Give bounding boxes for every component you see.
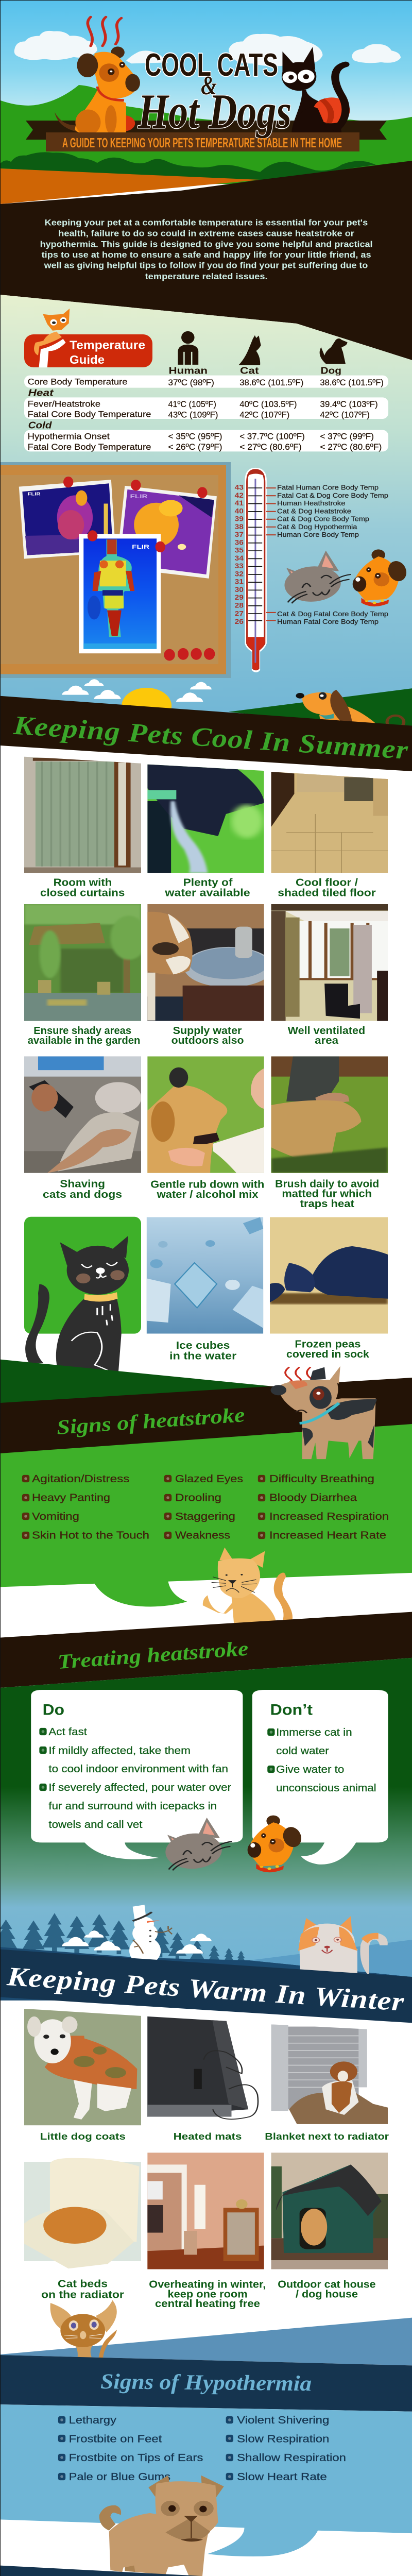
thermometer numbers: 40 bbox=[235, 507, 244, 515]
ribbon bbox=[26, 46, 387, 151]
icon: small clouds bbox=[62, 679, 212, 702]
thermometer numbers: 34 bbox=[235, 554, 244, 562]
captions row 4 bbox=[169, 1339, 370, 1362]
captions row 4: Frozen peas bbox=[295, 1339, 360, 1350]
list: heatstroke signs: Skin Hot to the Touch bbox=[32, 1530, 149, 1541]
thermometer numbers: 35 bbox=[235, 547, 244, 554]
column heads: Human bbox=[169, 366, 208, 376]
thermometer numbers: 30 bbox=[235, 586, 244, 594]
row labels: Fever/Heatstroke bbox=[28, 399, 100, 409]
values: 39.4ºC (103ºF) bbox=[320, 399, 378, 409]
heat and cold subheads bbox=[28, 388, 54, 430]
thermometer bbox=[245, 468, 276, 672]
column heads bbox=[169, 366, 341, 376]
navy band signs bbox=[0, 2355, 412, 2412]
thermal photo: cat bbox=[19, 480, 115, 559]
captions row 1: water available bbox=[164, 888, 250, 899]
thermometer legend: Cat & Dog Core Body Temp bbox=[277, 515, 369, 523]
captions row 2 bbox=[28, 1025, 365, 1046]
photo: ice cubes bbox=[147, 1217, 263, 1334]
list: do: to cool indoor environment with fan bbox=[48, 1764, 228, 1775]
hero scene bbox=[0, 0, 412, 204]
hypothermia panel bbox=[0, 2300, 412, 2576]
captions winter row 2: central heating free bbox=[155, 2298, 260, 2310]
light blue area bbox=[0, 2404, 412, 2556]
list: heatstroke signs: Staggering bbox=[175, 1511, 235, 1522]
thermometer legend: Fatal Cat & Dog Core Body Temp bbox=[277, 492, 388, 499]
photo: cat bed on radiator bbox=[24, 2153, 141, 2269]
heat and cold subheads: Heat bbox=[28, 388, 54, 398]
list: do: Act fast bbox=[48, 1726, 87, 1738]
intro background bbox=[0, 161, 412, 360]
thermometer numbers: 32 bbox=[235, 570, 244, 578]
captions row 1: Room with bbox=[54, 877, 112, 888]
captions winter row 2: / dog house bbox=[296, 2289, 358, 2300]
sky bbox=[0, 0, 412, 139]
list: heatstroke signs: Vomiting bbox=[32, 1511, 79, 1522]
icon: cat silhouette bbox=[238, 335, 261, 365]
list: hypothermia signs: Pale or Blue Gums bbox=[69, 2471, 170, 2483]
list: heatstroke signs: Heavy Panting bbox=[32, 1493, 110, 1504]
thermometer numbers: 41 bbox=[235, 499, 244, 507]
captions winter row 2: Overheating in winter, bbox=[149, 2279, 266, 2291]
captions row 3: water / alcohol mix bbox=[156, 1189, 259, 1200]
temperature guide badge: Guide bbox=[70, 353, 105, 366]
list: do: If mildly affected, take them bbox=[48, 1745, 191, 1756]
values: 38.6ºC (101.5ºF) bbox=[239, 378, 303, 387]
title bbox=[138, 47, 291, 139]
summer scene bbox=[62, 679, 412, 730]
photo: tiled floor bbox=[271, 772, 388, 873]
values: 43ºC (109ºF) bbox=[168, 410, 218, 419]
icon: pug bbox=[99, 2476, 224, 2576]
captions winter row 2 bbox=[41, 2279, 376, 2310]
photo: outdoor water bbox=[147, 904, 273, 1021]
captions winter row 2: on the radiator bbox=[41, 2289, 124, 2300]
values: 41ºC (105ºF) bbox=[168, 399, 216, 409]
list: don't: cold water bbox=[276, 1745, 329, 1757]
icon: sad dog bbox=[271, 1366, 377, 1459]
list: hypothermia signs: Violent Shivering bbox=[237, 2415, 329, 2426]
list: do: If severely affected, pour water over bbox=[48, 1782, 231, 1793]
hills bbox=[0, 85, 412, 184]
row labels: Core Body Temperature bbox=[28, 377, 127, 386]
intro text bbox=[40, 218, 373, 281]
thermometer legend: Human Fatal Core Body Temp bbox=[277, 618, 379, 625]
dark green wedge bbox=[0, 1360, 279, 1403]
captions row 2: Ensure shady areas bbox=[33, 1025, 131, 1037]
captions row 2: Well ventilated bbox=[288, 1025, 365, 1037]
light blue wedge bbox=[0, 2318, 412, 2365]
brown band signs bbox=[0, 1378, 412, 1453]
heading: signs of hypothermia: Signs of Hypothermia bbox=[100, 2370, 312, 2396]
captions row 1 bbox=[40, 877, 376, 899]
list: heatstroke signs bbox=[22, 1473, 389, 1541]
list: hypothermia signs: Slow Respiration bbox=[237, 2433, 329, 2445]
photo: heated mat bbox=[147, 2016, 258, 2119]
captions row 1: closed curtains bbox=[40, 888, 125, 899]
captions row 1: Plenty of bbox=[183, 877, 233, 888]
thermometer numbers: 38 bbox=[235, 523, 244, 531]
row labels: Fatal Core Body Temperature bbox=[28, 410, 151, 419]
speech bubble: do bbox=[31, 1690, 243, 1859]
photo: garden shade bbox=[24, 904, 147, 1021]
list: heatstroke signs: Glazed Eyes bbox=[175, 1473, 243, 1485]
photo: brushing a dog bbox=[271, 1056, 388, 1173]
temperature guide badge: Temperature bbox=[70, 338, 145, 351]
icon: heat waves bbox=[88, 17, 122, 46]
icon: snow clouds bbox=[62, 1930, 212, 1954]
captions row 3: Shaving bbox=[60, 1179, 105, 1190]
captions row 1: Cool floor / bbox=[296, 877, 358, 888]
photo: dog coat bbox=[24, 2009, 141, 2125]
intro text: Keeping your pet at a comfortable temperature is essential for your pet's bbox=[45, 218, 368, 228]
icon: hound dog bbox=[296, 690, 404, 728]
green card bbox=[24, 1217, 141, 1334]
icon: brown big-eared cat bbox=[50, 2300, 117, 2358]
captions row 3: Gentle rub down with bbox=[150, 1179, 264, 1191]
thermometer legend: Cat & Dog Heatstroke bbox=[277, 507, 351, 515]
photo: room without heating bbox=[147, 2153, 264, 2269]
values: 40ºC (103.5ºF) bbox=[239, 399, 297, 409]
captions winter row 1 bbox=[40, 2131, 389, 2142]
column heads: Dog bbox=[320, 366, 341, 376]
list: do bbox=[39, 1726, 231, 1831]
list: heatstroke signs: Agitation/Distress bbox=[32, 1473, 130, 1485]
thermal photo: runner bbox=[79, 534, 161, 653]
icon: cat and dog faces bbox=[160, 1816, 303, 1873]
intro text: temperature related issues. bbox=[145, 272, 268, 281]
heading: signs of heatstroke: Signs of heatstroke bbox=[56, 1403, 246, 1439]
ground bbox=[0, 1947, 412, 2001]
list: don't: Give water to bbox=[276, 1764, 344, 1775]
photo: rub down bbox=[147, 1056, 264, 1173]
captions row 1: shaded tiled floor bbox=[278, 888, 376, 899]
thermometer numbers: 28 bbox=[235, 602, 244, 609]
captions row 3: matted fur which bbox=[282, 1189, 372, 1200]
list: heatstroke signs: Difficulty Breathing bbox=[269, 1473, 374, 1485]
list: hypothermia signs: Slow Heart Rate bbox=[237, 2471, 327, 2483]
icon: sad orange cat bbox=[203, 1548, 293, 1623]
thermometer numbers: 33 bbox=[235, 562, 244, 570]
winter scene bbox=[0, 1905, 412, 2001]
speech bubble: do: Do bbox=[43, 1702, 64, 1719]
heading: treating heatstroke: Treating heatstroke bbox=[57, 1637, 249, 1673]
thermometer numbers: 29 bbox=[235, 594, 244, 601]
icon: pine trees bbox=[0, 1913, 246, 1964]
intro text: health, failure to do so could in extreme cases cause heatstroke or bbox=[58, 229, 354, 238]
list: hypothermia signs: Frostbite on Feet bbox=[69, 2433, 162, 2445]
thermometer legend: Cat & Dog Fatal Core Body Temp bbox=[277, 610, 388, 618]
list: hypothermia signs: Shallow Respiration bbox=[237, 2452, 346, 2464]
captions winter row 2: Cat beds bbox=[58, 2279, 108, 2290]
title: Hot Dogs bbox=[138, 84, 291, 139]
temperature guide table bbox=[24, 309, 388, 452]
hill bbox=[229, 688, 412, 730]
thermal photo: runner: FLIR bbox=[132, 544, 150, 550]
captions winter row 1: Heated mats bbox=[174, 2131, 242, 2142]
values: 37ºC (98ºF) bbox=[168, 378, 214, 387]
captions winter row 2: Outdoor cat house bbox=[278, 2279, 376, 2291]
photo: shaving a cat bbox=[24, 1056, 141, 1173]
row labels bbox=[28, 377, 151, 452]
navy band treating bbox=[0, 2566, 412, 2576]
captions row 2: outdoors also bbox=[171, 1035, 244, 1046]
ribbon centre bbox=[46, 132, 359, 151]
intro text: well as giving helpful tips to follow if you do find your pet suffering due to bbox=[44, 261, 368, 270]
photo: ventilated room bbox=[271, 904, 388, 1021]
thermometer numbers: 31 bbox=[235, 578, 244, 586]
ribbon tails bbox=[26, 121, 387, 140]
list: heatstroke signs: Increased Respiration bbox=[269, 1511, 389, 1522]
thermometer numbers: 43 bbox=[235, 484, 244, 492]
row labels: Fatal Core Body Temperature bbox=[28, 442, 151, 452]
thermal photo: dog: FLIR bbox=[130, 493, 148, 499]
list: heatstroke signs: Weakness bbox=[175, 1530, 230, 1541]
list: heatstroke signs: Bloody Diarrhea bbox=[269, 1493, 357, 1504]
icon: cat held up by hand bbox=[34, 309, 70, 367]
thermal photo: dog bbox=[116, 486, 217, 579]
values: 42ºC (107ºF) bbox=[320, 410, 370, 419]
values: < 26ºC (79ºF) bbox=[168, 442, 222, 452]
icon: human bbox=[178, 331, 198, 365]
captions row 4: Ice cubes bbox=[176, 1340, 230, 1351]
thermometer numbers: 42 bbox=[235, 492, 244, 499]
bushes bbox=[0, 152, 376, 181]
captions row 4: covered in sock bbox=[286, 1349, 370, 1360]
list: hypothermia signs bbox=[58, 2415, 346, 2483]
thermometer numbers: 27 bbox=[235, 610, 244, 618]
captions row 3 bbox=[43, 1179, 379, 1210]
brown band treating bbox=[0, 1612, 412, 1688]
values: 42ºC (107ºF) bbox=[239, 410, 289, 419]
heat and cold subheads: Cold bbox=[28, 420, 53, 430]
values: < 27ºC (80.6ºF) bbox=[239, 442, 302, 452]
temperature guide badge bbox=[24, 309, 152, 367]
clouds bbox=[14, 31, 401, 66]
captions row 3: cats and dogs bbox=[43, 1189, 122, 1200]
list: don't: Immerse cat in bbox=[276, 1727, 352, 1738]
list: do: fur and surround with icepacks in bbox=[48, 1801, 217, 1812]
photo: blanket next to radiator bbox=[271, 2024, 388, 2125]
icon: ginger and white cat bbox=[298, 1916, 388, 2001]
orange path bbox=[0, 168, 260, 204]
icon: black cat bbox=[25, 1236, 129, 1374]
icon: dog silhouette bbox=[320, 338, 347, 364]
thermometer legend: Fatal Human Core Body Temp bbox=[277, 484, 379, 492]
title: COOL CATS bbox=[145, 47, 278, 83]
photo: dog drinking water bbox=[147, 765, 264, 873]
values: < 37ºC (99ºF) bbox=[320, 432, 374, 441]
corkboard with thermal photos bbox=[0, 462, 231, 678]
intro text: tips to use at home to ensure a safe and happy life for your little friend, as bbox=[42, 250, 371, 260]
thermometer legend: Cat & Dog Hypothermia bbox=[277, 523, 357, 531]
row labels: Hypothermia Onset bbox=[28, 432, 110, 441]
page edge line bbox=[0, 0, 412, 1]
icon: black cat bbox=[282, 47, 350, 133]
thermometer numbers bbox=[235, 484, 244, 625]
values: < 27ºC (80.6ºF) bbox=[320, 442, 382, 452]
speech bubble: don't bbox=[252, 1690, 388, 1865]
green background bbox=[0, 1419, 412, 1606]
thermometer legend bbox=[277, 484, 388, 625]
icon: sun bbox=[122, 688, 171, 724]
values bbox=[168, 378, 384, 452]
captions row 2: Supply water bbox=[173, 1025, 242, 1037]
icon: cat and dog faces bbox=[279, 549, 408, 606]
thermal photo: cat: FLIR bbox=[28, 492, 40, 497]
list: hypothermia signs: Frostbite on Tips of Ears bbox=[69, 2452, 203, 2464]
photo: closed curtains bbox=[24, 757, 141, 873]
captions winter row 2: keep one room bbox=[168, 2289, 248, 2300]
list: heatstroke signs: Increased Heart Rate bbox=[269, 1530, 386, 1541]
row backgrounds bbox=[24, 376, 388, 451]
intro text: hypothermia. This guide is designed to give you some helpful and practical bbox=[40, 240, 373, 249]
thermometer legend: Human Heathstroke bbox=[277, 499, 345, 507]
captions row 2: area bbox=[315, 1035, 339, 1046]
icon: orange dog bbox=[55, 46, 140, 135]
captions row 2: available in the garden bbox=[28, 1035, 140, 1046]
thermometer legend: Human Core Body Temp bbox=[277, 531, 359, 538]
captions row 3: Brush daily to avoid bbox=[275, 1179, 379, 1190]
list: don't bbox=[267, 1727, 376, 1794]
heading: keeping pets warm: Keeping Pets Warm In Winter bbox=[6, 1962, 405, 2017]
values: 38.6ºC (101.5ºF) bbox=[320, 378, 384, 387]
captions row 4: in the water bbox=[169, 1351, 236, 1362]
speech bubble: don't: Don’t bbox=[270, 1702, 313, 1719]
photo: outdoor cat house bbox=[271, 2153, 388, 2269]
list: don't: unconscious animal bbox=[276, 1783, 376, 1794]
icon: snowman bbox=[129, 1905, 172, 1964]
thermometer numbers: 26 bbox=[235, 618, 244, 625]
captions winter row 1: Blanket next to radiator bbox=[265, 2131, 389, 2142]
captions winter row 1: Little dog coats bbox=[40, 2131, 126, 2142]
icon: red pins bbox=[63, 477, 215, 660]
mint background panel bbox=[0, 295, 412, 762]
banner: winter bbox=[0, 1950, 412, 2023]
list: hypothermia signs: Lethargy bbox=[69, 2415, 116, 2426]
green to blue gradient background bbox=[0, 1658, 412, 1984]
heatstroke panel bbox=[0, 1366, 412, 1688]
heading: keeping pets cool: Keeping Pets Cool In Summer bbox=[12, 711, 409, 765]
title: & bbox=[201, 71, 217, 100]
column heads: Cat bbox=[240, 366, 259, 376]
photo: frozen peas in sock bbox=[270, 1217, 388, 1334]
captions row 3: traps heat bbox=[300, 1198, 354, 1210]
values: < 35ºC (95ºF) bbox=[168, 432, 222, 441]
list: do: towels and call vet bbox=[48, 1819, 143, 1831]
banner: summer bbox=[0, 696, 412, 771]
thermometer numbers: 37 bbox=[235, 531, 244, 538]
thermometer numbers: 39 bbox=[235, 515, 244, 523]
values: < 37.7ºC (100ºF) bbox=[239, 432, 305, 441]
thermometer numbers: 36 bbox=[235, 539, 244, 546]
list: heatstroke signs: Drooling bbox=[175, 1493, 221, 1504]
